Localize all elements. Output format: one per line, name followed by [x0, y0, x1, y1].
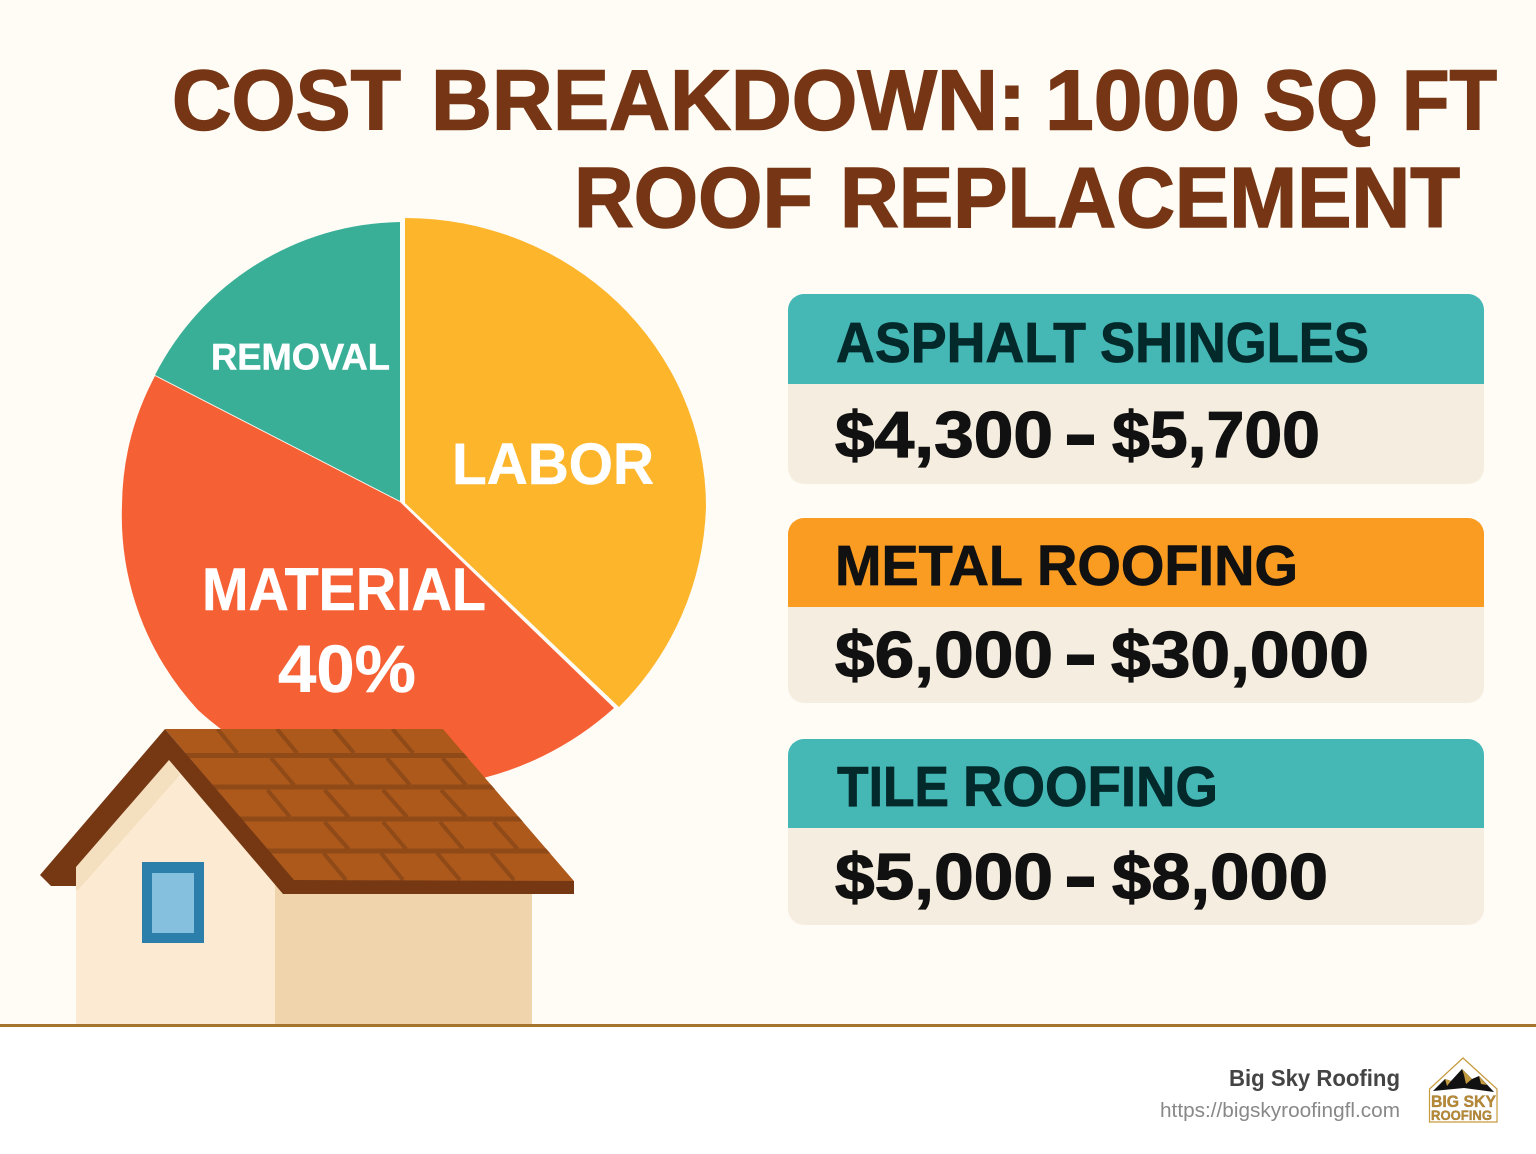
side wall: [275, 882, 532, 1025]
price: asphalt shingles: [835, 398, 1320, 471]
label: labor: LABOR: [452, 432, 654, 497]
heading: asphalt shingles: ASPHALT: [836, 311, 1086, 375]
label: material: MATERIAL: [202, 556, 486, 623]
icon: Big Sky Roofing logo: ROOFING: [1431, 1107, 1492, 1123]
price: tile roofing: $5,000: [835, 840, 1053, 913]
title: COST: [172, 54, 401, 148]
heading: tile roofing: TILE: [837, 755, 949, 819]
window: [142, 862, 204, 943]
price: asphalt shingles: $5,700: [1112, 398, 1320, 471]
price: asphalt shingles: –: [1067, 398, 1094, 471]
label: removal: REMOVAL: [211, 336, 390, 378]
title: [172, 54, 1497, 246]
heading: asphalt shingles: [836, 311, 1369, 375]
footer brand name: Big Sky Roofing: [1229, 1065, 1400, 1091]
title: ROOF: [574, 151, 813, 246]
price: asphalt shingles: $4,300: [835, 398, 1053, 471]
heading: metal roofing: ROOFING: [1037, 534, 1298, 598]
title: BREAKDOWN:: [431, 54, 1026, 148]
heading: tile roofing: ROOFING: [963, 755, 1218, 819]
icon: Big Sky Roofing logo: [1430, 1058, 1497, 1123]
icon: Big Sky Roofing logo: BIG SKY: [1431, 1093, 1496, 1111]
icon: house: [40, 729, 574, 1025]
price: tile roofing: [835, 840, 1328, 913]
roof fascia: [40, 729, 574, 894]
panel: metal roofing: [788, 518, 1484, 703]
front wall: [76, 760, 275, 1025]
panel: asphalt shingles: [788, 294, 1484, 484]
label: 40 percent: 40%: [278, 632, 416, 707]
pie slice: removal: [155, 222, 400, 501]
heading: metal roofing: [835, 534, 1298, 598]
ground line: [0, 1024, 1536, 1027]
pie slice: material: [122, 376, 614, 789]
price: tile roofing: –: [1067, 840, 1094, 913]
title: 1000: [1045, 54, 1240, 148]
panel: tile roofing: [788, 739, 1484, 925]
title: SQ: [1263, 54, 1378, 148]
price: metal roofing: –: [1067, 618, 1094, 691]
pie slice: labor: [405, 218, 706, 707]
footer url: https://bigskyroofingfl.com: [1160, 1100, 1400, 1122]
title: FT: [1402, 54, 1497, 148]
price: metal roofing: $6,000: [835, 618, 1053, 691]
price: metal roofing: [835, 618, 1369, 691]
title: REPLACEMENT: [840, 151, 1460, 246]
price: tile roofing: $8,000: [1112, 840, 1328, 913]
heading: asphalt shingles: SHINGLES: [1100, 311, 1369, 375]
heading: metal roofing: METAL: [835, 534, 1023, 598]
pie chart: [122, 218, 706, 789]
heading: tile roofing: [837, 755, 1218, 819]
price: metal roofing: $30,000: [1111, 618, 1369, 691]
roof shingles: [165, 729, 574, 881]
